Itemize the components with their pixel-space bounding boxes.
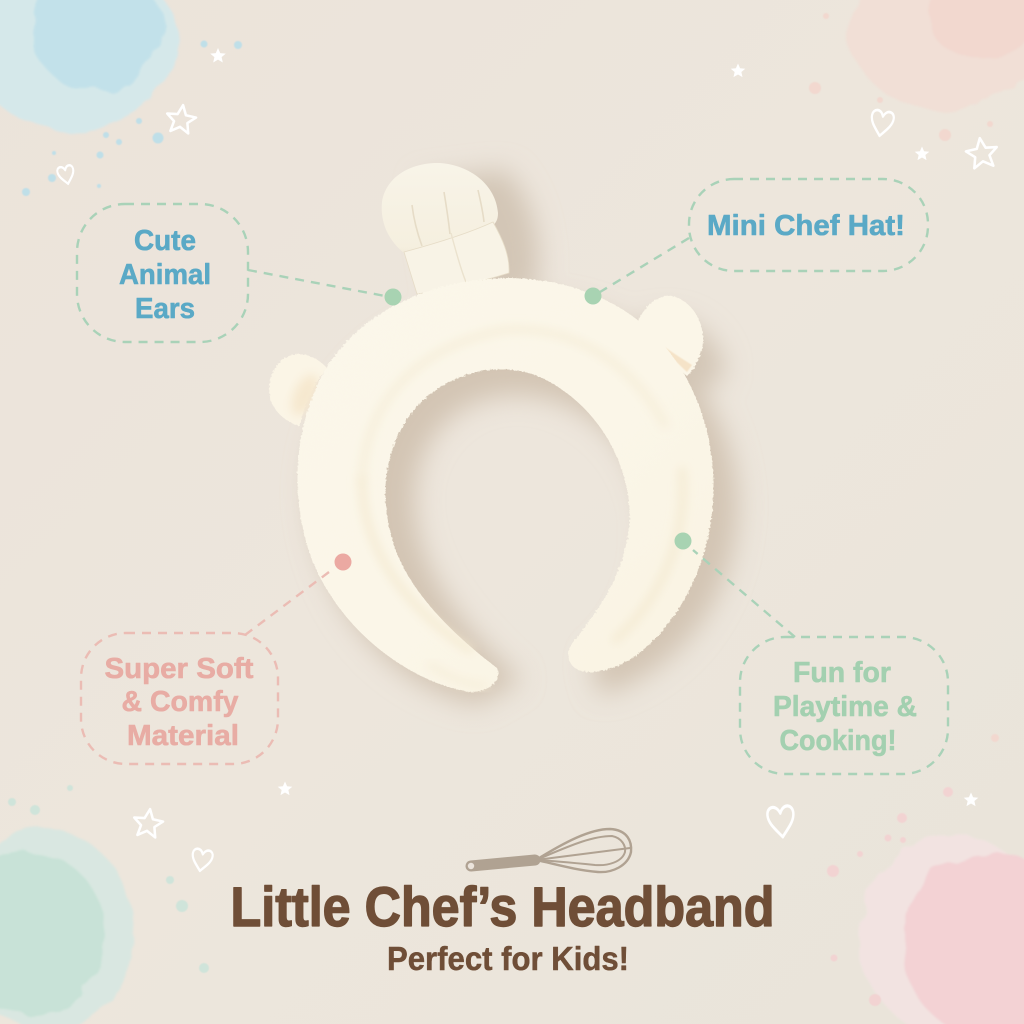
label text: Cooking! [780,725,896,757]
white filled stars [210,48,978,806]
label text: Fun for [793,657,891,689]
connector: soft [245,554,352,635]
connector: fun [674,532,795,637]
label text: Playtime & [773,691,917,723]
watercolor blob: top-left blue [0,0,176,130]
bubble: Fun for Playtime [740,637,948,774]
ear: left [269,354,327,426]
label text: Super Soft [104,653,254,685]
watercolor blob: bottom-left green [0,830,133,1024]
bubble: Mini Chef Hat [689,179,928,271]
outlined hearts [57,109,895,873]
watercolor blob: top-right pink [849,0,1024,110]
label text [119,225,211,325]
label text: Ears [135,293,195,325]
bubble: Super Soft [81,633,278,764]
watercolor blob: bottom-right pink [858,835,1024,1024]
connector: hat [584,238,689,304]
title: Little Chef’s Headband [230,875,774,938]
bubble: Cute Animal Ears [77,204,248,342]
headband shadow [310,170,738,705]
chef hat [382,163,509,294]
label text: & Comfy [122,686,238,718]
label text: Cute [134,225,196,257]
product: headband [269,163,714,692]
label text [104,653,254,752]
label text [773,657,917,757]
connector: ears [248,270,402,306]
band crease shading [362,330,683,686]
label text: Material [127,720,239,752]
label text: Animal [119,259,211,291]
icon: whisk [468,829,631,872]
label text: Mini Chef Hat! [707,210,905,242]
ear: right [637,296,703,376]
subtitle: Perfect for Kids! [387,940,629,977]
plush band [297,278,714,692]
outlined stars [132,103,999,838]
